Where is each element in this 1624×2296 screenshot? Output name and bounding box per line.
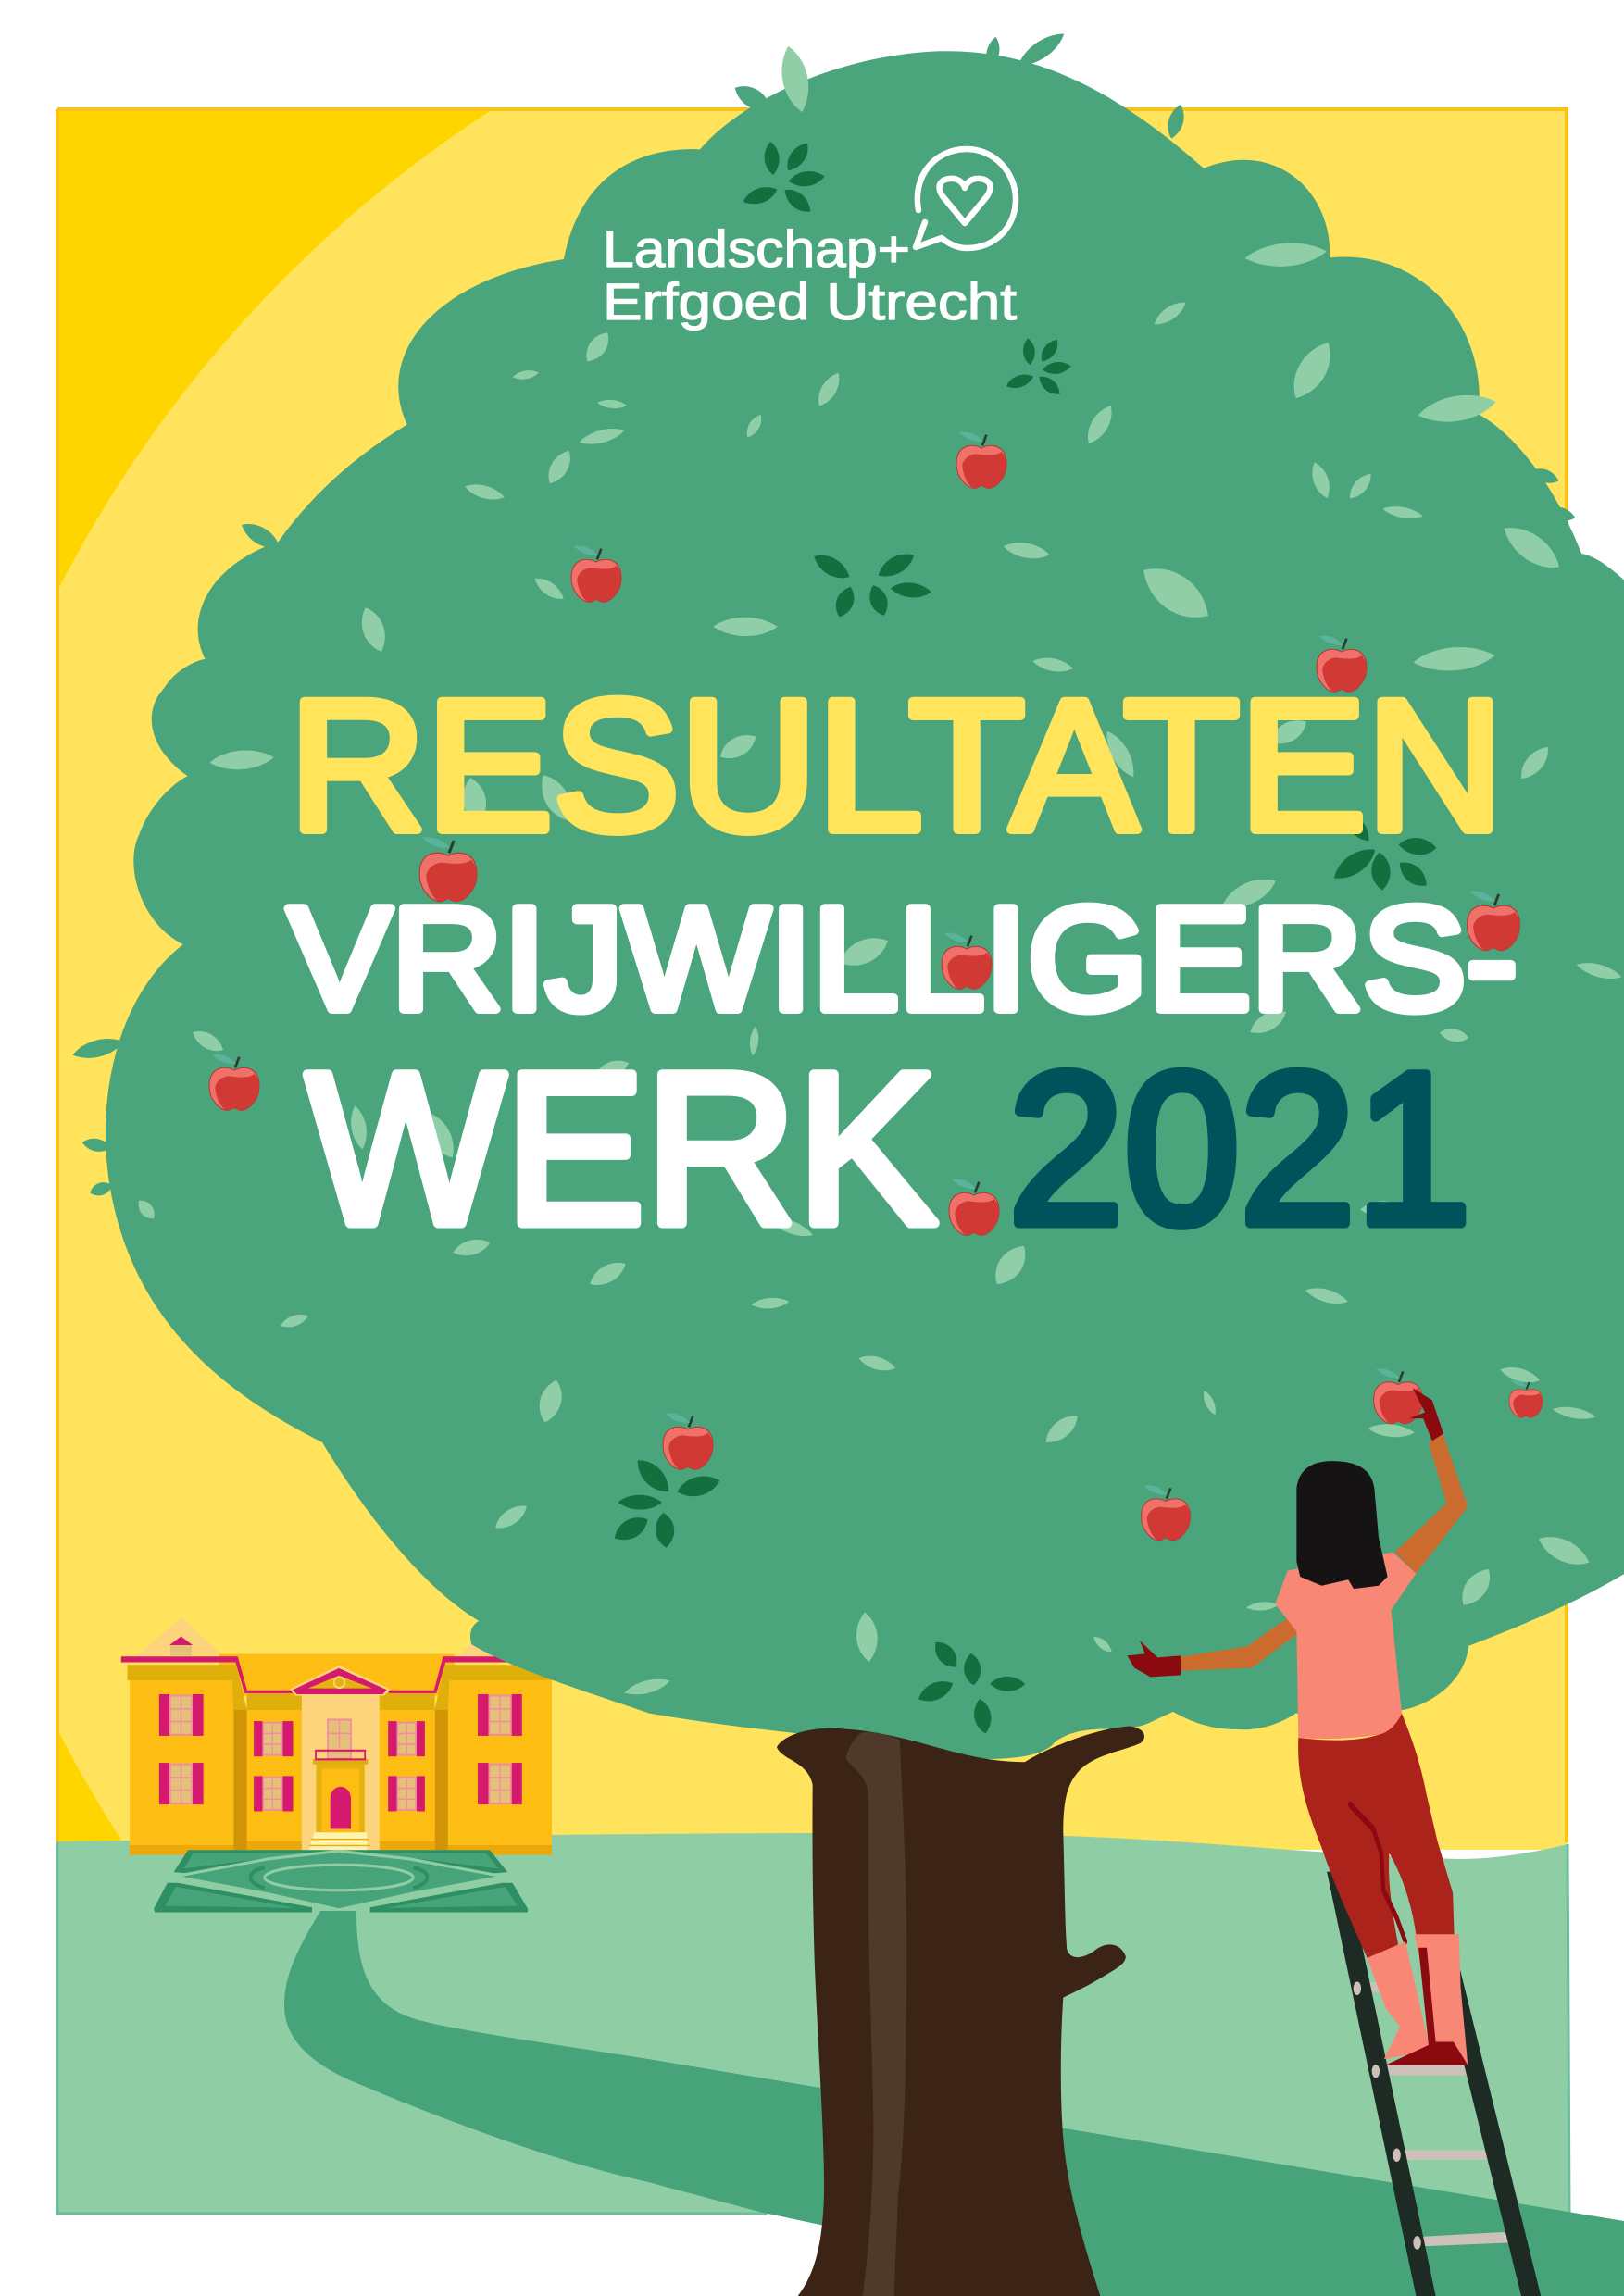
- logo text: Erfgoed Utrecht: [603, 272, 1017, 331]
- logo text: [603, 219, 1017, 331]
- shirt: [1275, 1553, 1416, 1739]
- illustration: mansion with garden: [121, 1617, 553, 1913]
- logo: Landschap+ Erfgoed Utrecht: [603, 149, 1017, 331]
- apples: [209, 432, 1543, 1541]
- title line: RESULTATEN: RESULTATEN: [289, 661, 1504, 869]
- logo text: Landschap+: [603, 219, 910, 278]
- title year: 2021: 2021: [1008, 1029, 1471, 1269]
- logo icon: speech bubble with heart: [916, 149, 1016, 248]
- arms: [1181, 1434, 1468, 1671]
- title: [288, 661, 1518, 1269]
- grass field: [57, 1833, 1569, 2215]
- mansion pediment: [289, 1666, 391, 1696]
- tree canopy: [106, 51, 1624, 1759]
- ladder: [1327, 1872, 1541, 2296]
- mansion entrance: [309, 1751, 370, 1850]
- tree trunk: [777, 1726, 1144, 2296]
- gloves: [1127, 1388, 1443, 1677]
- title line: WERK: WERK: [306, 1029, 937, 1269]
- boots: [1368, 1934, 1468, 2065]
- person picking apples on ladder: [1127, 1388, 1541, 2296]
- mansion dormers: [169, 1637, 511, 1656]
- title line: VRIJWILLIGERS-: VRIJWILLIGERS-: [288, 878, 1518, 1041]
- mansion attics: [136, 1617, 537, 1656]
- tree: small leaves on silhouette: [70, 27, 1577, 1199]
- hair: [1296, 1461, 1388, 1589]
- background: sky with sun: [56, 107, 1568, 1850]
- canopy: dark leaf clusters: [610, 139, 1437, 1735]
- mansion cornices: [121, 1656, 553, 1693]
- canopy: light leaves: [134, 44, 1623, 1699]
- formal garden: [154, 1850, 528, 1913]
- mansion central roof: [219, 1654, 455, 1696]
- mansion walls: [127, 1665, 553, 1855]
- mansion windows: [159, 1694, 522, 1811]
- garden path: [284, 1911, 1624, 2296]
- frame edge of grass: [57, 1842, 1569, 2215]
- trouser crease: [1350, 1804, 1405, 1941]
- trousers: [1298, 1714, 1455, 1960]
- trunk highlight: [845, 1732, 906, 2296]
